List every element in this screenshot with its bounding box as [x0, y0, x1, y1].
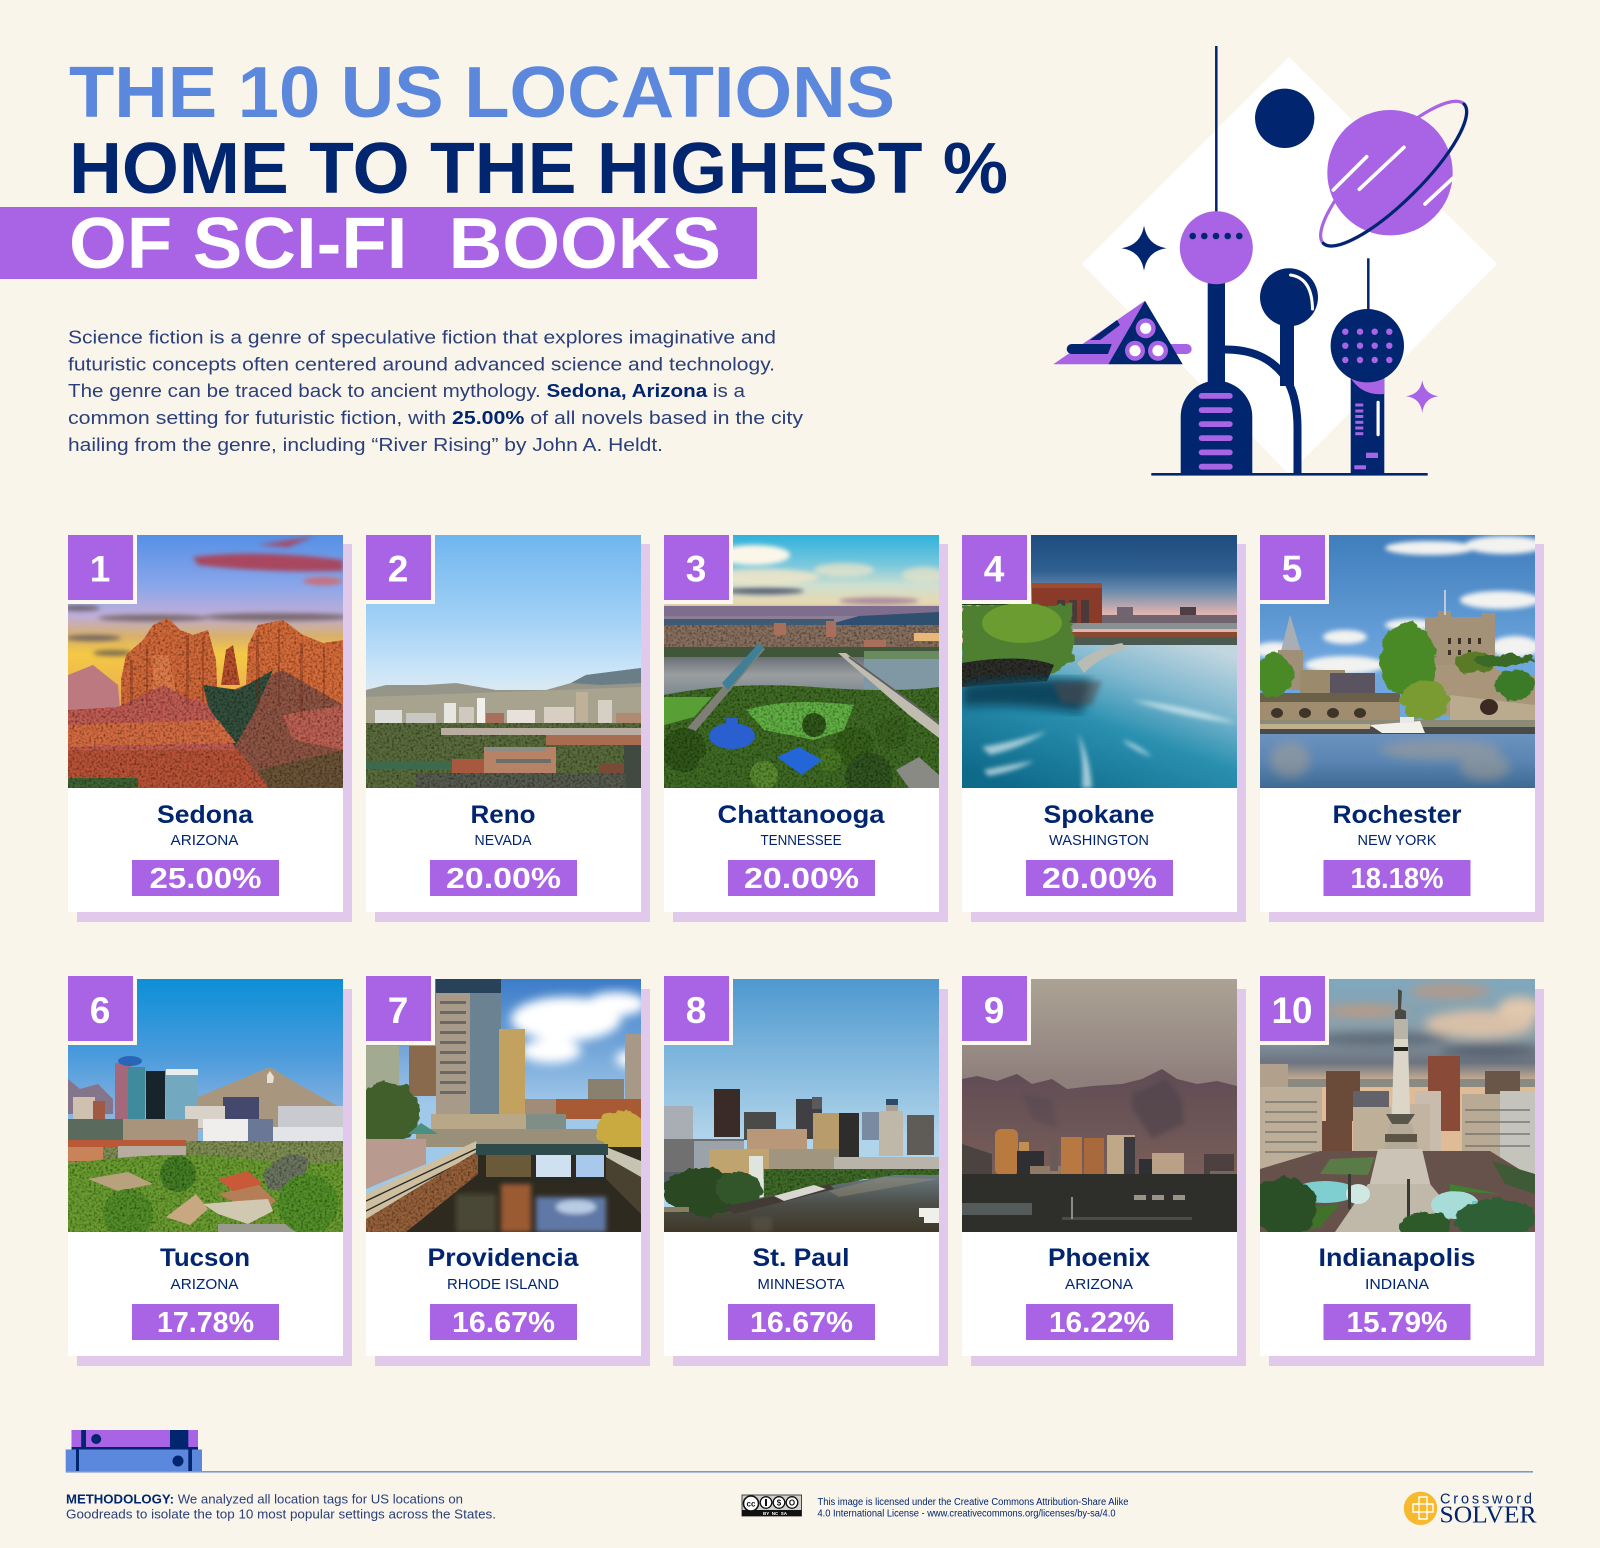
title — [0, 53, 1008, 284]
rank badge: 6 — [90, 990, 110, 1031]
rank badge — [366, 535, 435, 604]
percentage — [132, 1304, 279, 1340]
card shadow — [971, 989, 1246, 1366]
percentage — [430, 1304, 577, 1340]
card body — [68, 979, 343, 1356]
card shadow — [77, 544, 352, 922]
panel: card 10 Indianapolis — [1253, 976, 1544, 1366]
methodology note: Goodreads to isolate the top 10 most popular settings across the States. — [66, 1506, 496, 1522]
state: WASHINGTON — [1049, 832, 1149, 849]
ground line — [1151, 473, 1428, 476]
city name: Reno — [470, 801, 536, 829]
intro paragraph: futuristic concepts often centered around advanced science and technology. — [68, 354, 775, 374]
state: RHODE ISLAND — [447, 1276, 559, 1293]
logo: Crossword Solver — [1404, 1492, 1537, 1528]
icon: creative commons badge: BY NC SA — [763, 1511, 788, 1516]
percentage — [430, 860, 577, 896]
rank badge — [366, 976, 435, 1045]
card shadow — [375, 544, 650, 922]
license text: This image is licensed under the Creative Commons Attribution-Share Alike — [818, 1497, 1129, 1508]
rank badge: 5 — [1282, 548, 1302, 590]
title line 2: HOME TO THE HIGHEST % — [69, 129, 1008, 209]
percentage: 20.00% — [744, 863, 859, 895]
intro paragraph: hailing from the genre, including “River Rising” by John A. Heldt. — [68, 434, 663, 455]
rank badge — [962, 535, 1031, 604]
percentage — [728, 860, 875, 896]
card shadow — [673, 989, 948, 1366]
panel: card 5 Rochester — [1253, 535, 1545, 922]
rank badge: 7 — [388, 990, 408, 1031]
rank badge — [68, 535, 137, 604]
rank badge — [1260, 976, 1329, 1045]
panel: card 8 St. Paul — [664, 976, 948, 1366]
tower: left with purple sphere — [1180, 46, 1253, 474]
photo: Chattanooga river park — [664, 535, 939, 788]
icon: creative commons badge: $ — [777, 1498, 782, 1508]
card shadow — [1269, 989, 1544, 1366]
state: INDIANA — [1365, 1276, 1429, 1293]
intro paragraph — [68, 326, 804, 455]
rank badge — [1260, 535, 1329, 604]
license text — [818, 1497, 1129, 1520]
photo: Indianapolis monument — [1260, 979, 1535, 1232]
icon: navy moon — [1255, 89, 1314, 148]
percentage — [1324, 1304, 1470, 1340]
photo: Rochester castle — [1260, 535, 1535, 788]
title line 1: THE 10 US LOCATIONS — [69, 53, 895, 133]
panel: card 1 Sedona — [60, 535, 353, 922]
card body — [962, 535, 1237, 912]
rank badge: 8 — [686, 990, 706, 1031]
state: ARIZONA — [170, 1276, 238, 1293]
rank badge: 3 — [686, 548, 706, 590]
percentage — [132, 860, 279, 896]
city name: Chattanooga — [718, 801, 886, 829]
icon: creative commons badge: cc — [747, 1500, 756, 1508]
percentage: 20.00% — [446, 863, 561, 895]
photo: Reno skyline — [366, 535, 641, 788]
percentage: 25.00% — [150, 863, 262, 895]
card shadow — [1269, 544, 1544, 922]
photo: St. Paul skyline — [664, 979, 939, 1232]
icon: navy star — [1122, 226, 1166, 271]
percentage — [1026, 860, 1173, 896]
illustration: sci-fi city and planet — [1053, 46, 1497, 476]
state: NEVADA — [474, 832, 532, 849]
methodology note: METHODOLOGY: We analyzed all location tags for US locations on — [66, 1492, 463, 1506]
city name: Phoenix — [1048, 1244, 1150, 1272]
icon: spaceship — [1053, 301, 1192, 364]
white diamond backdrop — [1082, 57, 1497, 474]
city name: St. Paul — [752, 1244, 850, 1272]
city name: Sedona — [157, 801, 254, 829]
card body — [664, 535, 939, 912]
card shadow — [673, 544, 948, 922]
percentage — [1026, 1304, 1173, 1340]
intro paragraph: Science fiction is a genre of speculative fiction that explores imaginative and — [68, 326, 776, 348]
photo: Providence canal — [366, 979, 641, 1232]
state: NEW YORK — [1358, 832, 1436, 849]
card body — [1260, 535, 1535, 912]
title band — [0, 207, 757, 279]
state: ARIZONA — [170, 832, 238, 849]
card body — [1260, 979, 1535, 1356]
icon: stacked books — [66, 1430, 202, 1471]
panel: card 2 Reno — [366, 535, 650, 922]
panel: card 3 Chattanooga — [662, 535, 948, 922]
state: MINNESOTA — [758, 1276, 844, 1293]
title line 3: OF SCI-FI BOOKS — [69, 204, 721, 284]
footer divider — [66, 1471, 1533, 1473]
city name: Indianapolis — [1318, 1244, 1476, 1272]
methodology note — [66, 1492, 496, 1522]
photo: Tucson skyline — [68, 979, 343, 1232]
tower: right with dotted sphere — [1331, 258, 1404, 474]
photo: Sedona red rocks — [68, 535, 343, 788]
icon: creative commons badge — [742, 1495, 802, 1516]
rank badge: 4 — [984, 548, 1005, 590]
city name: Providencia — [428, 1244, 580, 1272]
card body — [366, 535, 641, 912]
percentage — [728, 1304, 875, 1340]
panel: card 6 Tucson — [68, 976, 352, 1366]
card body — [68, 535, 343, 912]
logo word: SOLVER: SOLVER — [1440, 1502, 1537, 1528]
rank badge: 9 — [984, 990, 1004, 1031]
city name: Spokane — [1044, 801, 1155, 829]
state: TENNESSEE — [760, 832, 842, 849]
intro paragraph: common setting for futuristic fiction, with 25.00% of all novels based in the city — [68, 407, 804, 428]
percentage: 16.22% — [1049, 1307, 1150, 1339]
percentage: 16.67% — [750, 1307, 853, 1339]
percentage: 15.79% — [1346, 1307, 1448, 1339]
rank badge — [664, 535, 733, 604]
card body — [664, 979, 939, 1356]
photo: Phoenix skyline — [962, 979, 1237, 1232]
photo: Spokane river — [962, 535, 1237, 788]
city name: Tucson — [160, 1244, 250, 1272]
license text: 4.0 International License - www.creativecommons.org/licenses/by-sa/4.0 — [818, 1508, 1116, 1520]
tower: middle curved stem with navy sphere — [1225, 268, 1318, 474]
rank badge — [68, 976, 137, 1045]
logo word: Crossword: Crossword — [1440, 1492, 1532, 1508]
card body — [962, 979, 1237, 1356]
icon: crossword coin — [1404, 1492, 1437, 1525]
percentage: 16.67% — [452, 1307, 555, 1339]
intro paragraph: The genre can be traced back to ancient mythology. Sedona, Arizona is a — [68, 380, 746, 401]
card shadow — [77, 989, 352, 1366]
state: ARIZONA — [1065, 1276, 1133, 1293]
icon: purple star — [1406, 380, 1438, 413]
panel: card 7 Providencia — [356, 976, 650, 1366]
percentage: 20.00% — [1042, 863, 1157, 895]
percentage: 18.18% — [1350, 863, 1444, 895]
rank badge — [664, 976, 733, 1045]
card shadow — [971, 544, 1246, 922]
rank badge: 10 — [1272, 990, 1312, 1031]
card body — [366, 979, 641, 1356]
card shadow — [375, 989, 650, 1366]
percentage: 17.78% — [157, 1307, 254, 1339]
rank badge: 1 — [90, 548, 110, 590]
rank badge — [962, 976, 1031, 1045]
icon: creative commons badge: O — [789, 1498, 795, 1508]
percentage — [1324, 860, 1470, 896]
rank badge: 2 — [388, 548, 408, 590]
panel: card 4 Spokane — [962, 535, 1246, 922]
icon: ringed planet — [1304, 84, 1484, 263]
panel: card 9 Phoenix — [962, 976, 1246, 1366]
city name: Rochester — [1332, 801, 1462, 829]
